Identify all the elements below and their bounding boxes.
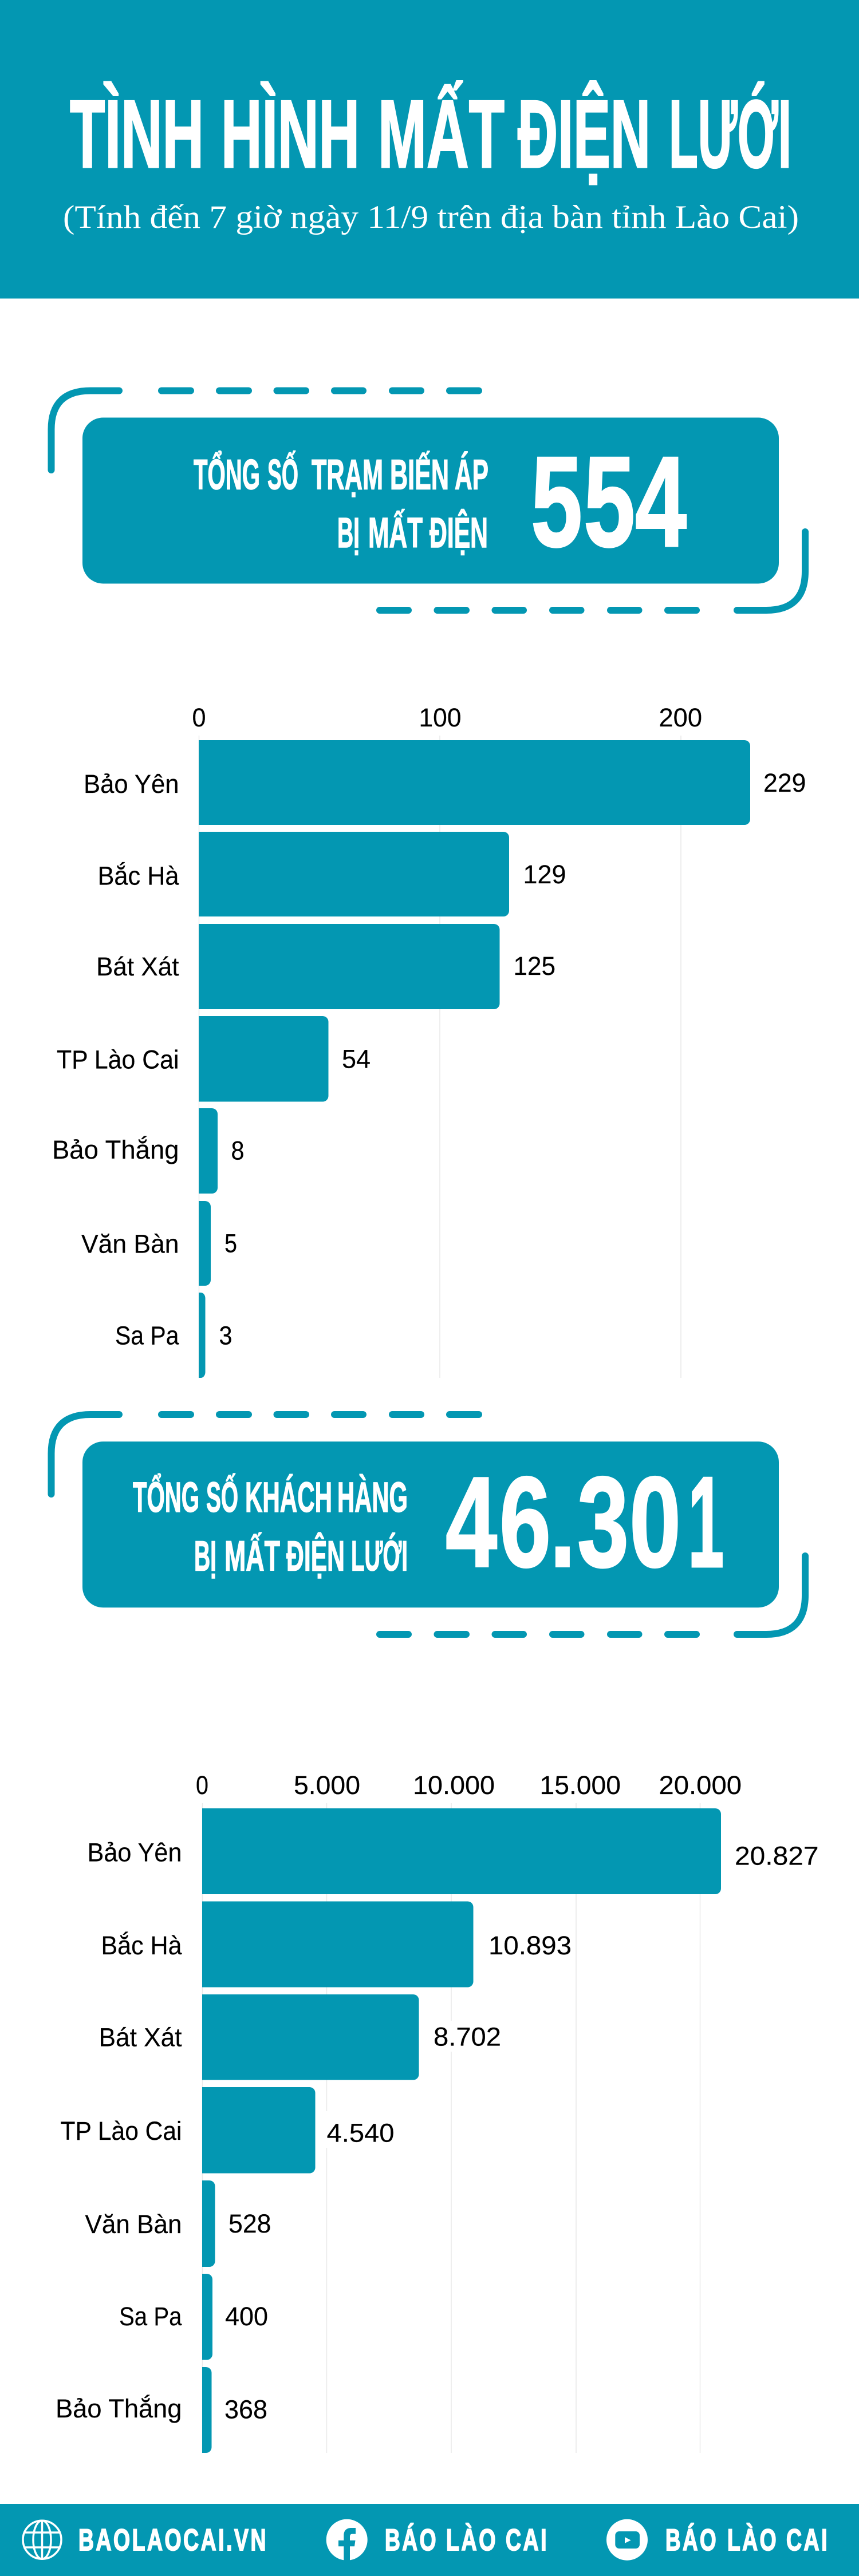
- bar: Bảo Thắng 368: Bảo Thắng: [56, 2394, 182, 2423]
- bar: Sa Pa 3: [115, 1293, 233, 1378]
- callout label line 2: MẤT: [368, 509, 423, 556]
- bar chart: stations by district: [52, 703, 806, 1378]
- bar: Bảo Thắng 368: [56, 2367, 267, 2453]
- dashed bracket bottom right: [380, 1556, 805, 1634]
- grid lines: [199, 736, 681, 1378]
- bar: Bắc Hà 129: Bắc Hà: [97, 861, 179, 891]
- bar: Bảo Yên 229: 229: [763, 768, 806, 797]
- bar: Bát Xát 125: [96, 924, 555, 1009]
- axis labels: 20.000: [659, 1771, 742, 1800]
- subtitle: (Tính đến 7 giờ ngày 11/9 trên địa bàn tỉnh Lào Cai): [63, 199, 799, 235]
- bar: Bảo Thắng 8: [52, 1108, 244, 1194]
- callout label line 1: ÁP: [455, 451, 488, 498]
- facebook label: CAI: [506, 2523, 549, 2557]
- callout label line 1: BIẾN: [390, 451, 449, 498]
- bar: Bắc Hà 10.893: Bắc Hà: [101, 1931, 182, 1960]
- callout box: [82, 1441, 779, 1607]
- bar: TP Lào Cai 54: 54: [342, 1044, 371, 1074]
- bar: Văn Bàn 528: 528: [228, 2209, 271, 2238]
- bar: TP Lào Cai 4.540: TP Lào Cai: [61, 2116, 182, 2146]
- bar: Sa Pa 400: 400: [225, 2302, 268, 2331]
- callout box: [82, 418, 779, 584]
- bar: TP Lào Cai 4.540: [61, 2087, 397, 2173]
- youtube label: BÁO: [665, 2523, 718, 2557]
- callout label line 2: [194, 1532, 408, 1580]
- callout label line 1: TỔNG: [133, 1473, 199, 1521]
- callout label line 2: ĐIỆN: [430, 509, 488, 556]
- icon: facebook: [326, 2519, 368, 2561]
- bar: Bảo Thắng 368: 368: [224, 2395, 267, 2424]
- bar: TP Lào Cai 54: [57, 1016, 371, 1101]
- dashed bracket top left: [52, 390, 479, 470]
- callout number: 554: [531, 430, 687, 574]
- bar: Văn Bàn 5: Văn Bàn: [81, 1230, 179, 1258]
- callout label line 2: BỊ: [194, 1532, 216, 1580]
- bar: Bắc Hà 129: [97, 832, 566, 916]
- bar: TP Lào Cai 54: TP Lào Cai: [57, 1045, 179, 1074]
- axis labels: 0: [196, 1771, 208, 1800]
- bar: Bảo Yên 229: Bảo Yên: [84, 769, 179, 799]
- bar: Bảo Yên 20.827: 20.827: [735, 1841, 819, 1871]
- axis labels: [192, 703, 702, 732]
- callout label line 1: SỐ: [267, 451, 298, 498]
- youtube label: LÀO: [727, 2523, 778, 2557]
- bar: Bát Xát 125: Bát Xát: [96, 952, 179, 981]
- dashed bracket top left: [52, 1415, 479, 1494]
- bar: Sa Pa 400: Sa Pa: [119, 2302, 182, 2331]
- callout label line 2: LƯỚI: [351, 1532, 408, 1580]
- bar chart: customers by district: [56, 1771, 819, 2453]
- facebook label: LÀO: [446, 2523, 498, 2557]
- axis labels: 0: [192, 703, 206, 732]
- bar: Bát Xát 125: 125: [513, 951, 555, 981]
- callout label line 2: [337, 509, 488, 556]
- youtube label: [665, 2523, 829, 2557]
- bar: Sa Pa 3: Sa Pa: [115, 1321, 179, 1350]
- bar: Văn Bàn 528: Văn Bàn: [85, 2210, 182, 2239]
- title: [70, 80, 791, 188]
- callout: total transformer stations: [52, 390, 805, 610]
- title: HÌNH: [221, 80, 360, 188]
- website label: BAOLAOCAI.VN: [78, 2523, 268, 2557]
- grid lines: [203, 1803, 700, 2453]
- bar: Bắc Hà 10.893: 10.893: [488, 1931, 572, 1960]
- bar: Văn Bàn 5: 5: [224, 1228, 237, 1258]
- bar: Văn Bàn 5: [81, 1201, 237, 1286]
- callout label line 1: [133, 1473, 408, 1521]
- title: TÌNH: [70, 80, 204, 188]
- bar: Bắc Hà 129: 129: [523, 860, 566, 889]
- bar: TP Lào Cai 4.540: 4.540: [326, 2118, 394, 2148]
- bar: Bắc Hà 10.893: [101, 1902, 572, 1988]
- bar: Bát Xát 8.702: 8.702: [434, 2022, 501, 2052]
- callout label line 2: MẤT: [224, 1532, 280, 1580]
- title: MẤT: [378, 80, 505, 188]
- icon: youtube: [606, 2519, 648, 2561]
- callout number: 46.30: [446, 1450, 681, 1594]
- bar: Bảo Yên 229: [84, 740, 806, 825]
- facebook label: [385, 2523, 549, 2557]
- bar: Sa Pa 3: 3: [219, 1321, 233, 1350]
- title: ĐIỆN: [518, 80, 651, 188]
- bar: Bảo Yên 20.827: Bảo Yên: [87, 1838, 182, 1867]
- bar: Bảo Thắng 8: Bảo Thắng: [52, 1135, 179, 1164]
- callout label line 1: TRẠM: [312, 451, 383, 498]
- axis labels: 15.000: [539, 1771, 621, 1800]
- bar: Bảo Thắng 8: 8: [231, 1136, 244, 1165]
- callout label line 1: KHÁCH: [245, 1473, 332, 1521]
- callout label line 2: BỊ: [337, 509, 360, 556]
- axis labels: 200: [659, 703, 702, 732]
- callout number: 1: [688, 1450, 724, 1594]
- footer panel: [0, 2504, 859, 2576]
- header panel: [0, 0, 859, 299]
- callout: total customers: [52, 1415, 805, 1634]
- dashed bracket bottom right: [380, 532, 805, 610]
- callout label line 2: ĐIỆN: [286, 1532, 345, 1580]
- axis labels: 10.000: [413, 1771, 495, 1800]
- axis labels: 100: [419, 703, 462, 732]
- callout label line 1: TỔNG: [194, 451, 260, 498]
- axis labels: [196, 1771, 742, 1800]
- callout label line 1: HÀNG: [337, 1473, 408, 1521]
- bar: Bảo Yên 20.827: [87, 1808, 819, 1894]
- callout label line 1: [194, 451, 488, 498]
- bar: Văn Bàn 528: [85, 2180, 271, 2267]
- bar: Bát Xát 8.702: [98, 1994, 504, 2080]
- bar: Sa Pa 400: [119, 2274, 268, 2360]
- youtube label: CAI: [786, 2523, 829, 2557]
- axis labels: 5.000: [294, 1771, 360, 1800]
- callout label line 1: SỐ: [206, 1473, 238, 1521]
- bar: Bát Xát 8.702: Bát Xát: [98, 2023, 182, 2052]
- facebook label: BÁO: [385, 2523, 438, 2557]
- icon: globe: [23, 2520, 61, 2559]
